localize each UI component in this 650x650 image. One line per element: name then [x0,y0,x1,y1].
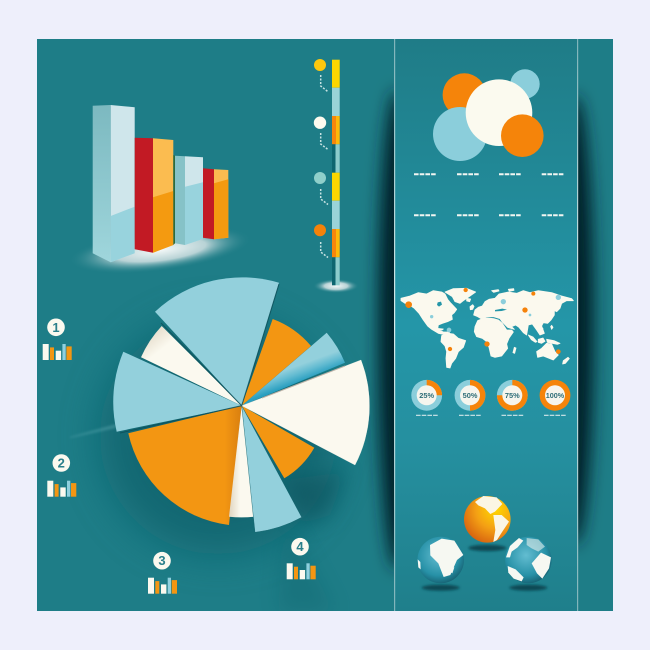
map location dots [405,288,561,354]
globe: blue left [417,537,464,591]
dotted connectors [321,75,328,258]
circle: small blue [510,69,540,99]
globe shadow right [509,585,547,591]
number badge 4: 4 [296,539,304,554]
donut dash labels [416,414,566,416]
legend 4 [287,538,316,579]
legend 1 [43,318,72,360]
tower segments [332,60,340,285]
donut: 25% [411,380,442,411]
map water patches [430,295,561,332]
continents [401,288,573,368]
donut: 100% [540,380,570,411]
slice: white bottom [229,406,254,517]
donut: 75%: 75% [505,391,520,400]
mini bars 1 [43,344,72,360]
slice: blue bottom [242,406,302,532]
slice: orange top right [242,319,311,406]
donut: 25%: 25% [419,391,435,400]
donut: 50% [455,380,485,411]
legend 2 [47,454,76,497]
slice edge shadows [120,284,345,433]
donut: 100%: 100% [546,391,565,400]
3D bar chart [66,105,254,282]
slice: blue left [113,352,242,432]
exploded pie chart [113,277,369,532]
globe: orange [464,496,511,551]
band shadow right [578,89,606,551]
globe: blue right [505,537,552,591]
bar 3 [173,155,203,245]
globe shadow left [422,585,460,591]
bar 1 [93,105,135,262]
orange globe continents [475,496,509,542]
overlapping circles chart [433,69,544,161]
slice: blue top [155,277,279,406]
circle: orange bottom [501,114,544,157]
slice: orange large [128,406,242,525]
placeholder dash labels [414,174,564,215]
tower base glow [313,279,359,293]
band shadow left [366,84,394,576]
mini bars 3 [148,578,177,594]
slice: blue small right [242,333,345,406]
slice: white right [242,360,369,465]
right globe continents [506,538,551,581]
bar 2 [135,138,173,253]
number badge 2: 2 [58,456,65,470]
map inland water [437,302,507,311]
timeline marker: teal [314,172,326,184]
left globe continents [418,539,463,577]
circle: white [466,79,532,146]
mini bars 4 [287,563,316,579]
band edge lines [394,39,578,611]
slice: white top left [141,326,242,406]
number badge 1: 1 [52,320,60,335]
circle: orange top [443,73,486,117]
timeline marker: yellow [314,59,326,71]
right column band [395,80,577,586]
bar 4 [203,168,228,239]
mini bars 2 [47,481,76,497]
donut: 50%: 50% [463,391,478,400]
circle: large blue [433,107,487,161]
world map [401,288,573,368]
donut: 75% [497,380,528,411]
legend 3 [148,552,177,594]
globe shadow orange [468,545,506,551]
bar chart floor glow [66,218,254,282]
number badge 3: 3 [158,553,166,568]
slice: orange bottom right [242,406,314,478]
pie drop shadow [70,318,345,612]
timeline marker: white [314,116,326,129]
timeline tower [313,59,359,293]
timeline marker: orange [314,224,326,236]
background panel [37,39,613,611]
